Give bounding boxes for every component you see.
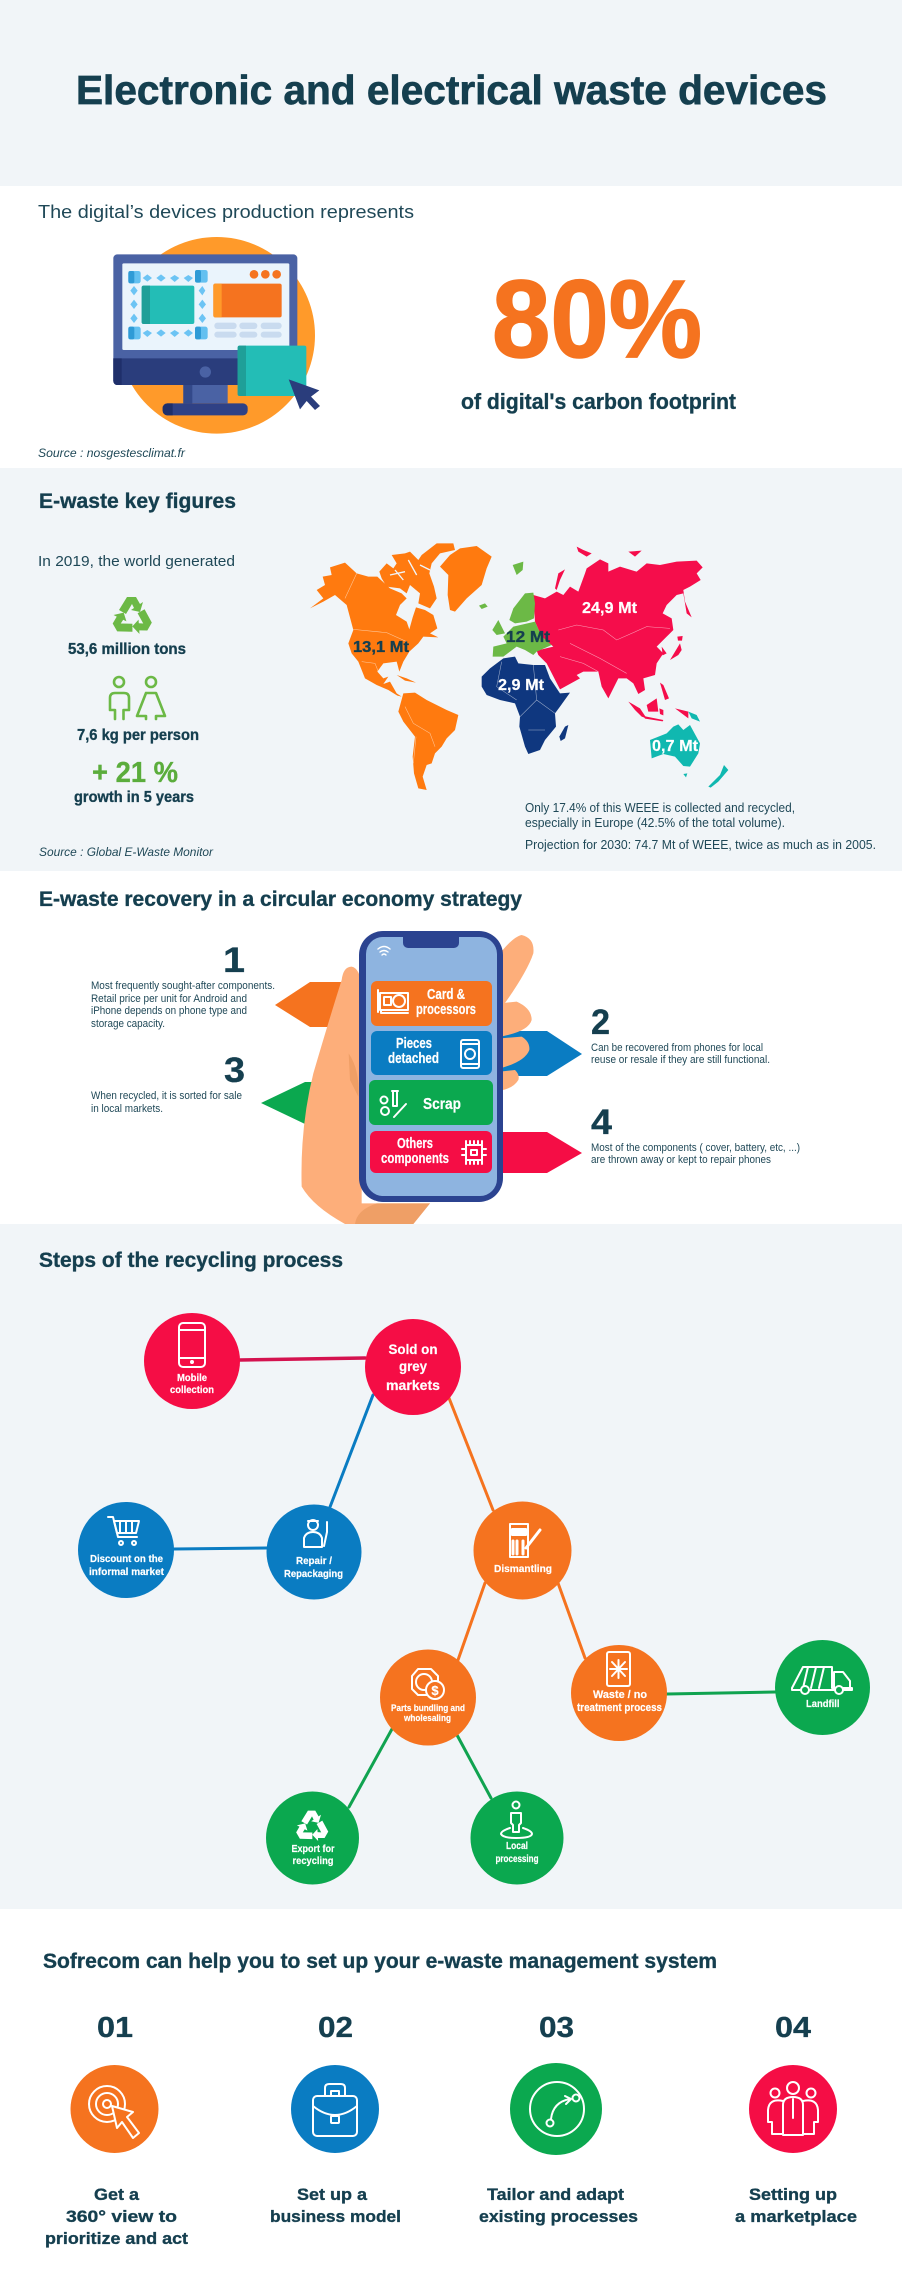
step 03: existing processes [479, 2207, 638, 2226]
stat: growth label: growth in 5 years [74, 789, 194, 806]
region: Europe [479, 562, 552, 657]
step 02: 02 [318, 2012, 353, 2044]
callout 4: Most of the components ( cover, battery, etc, ...) [591, 1142, 800, 1154]
node: landfill [775, 1640, 870, 1735]
node: discount on the informal market: Discount on the [90, 1553, 163, 1565]
row: card and processors: processors [416, 1002, 476, 1018]
step 04 [735, 2012, 857, 2226]
node: export for recycling: Export for [292, 1843, 334, 1855]
step 01: 360° view to [66, 2207, 177, 2226]
row: card and processors [371, 981, 492, 1026]
callout 4: are thrown away or kept to repair phones [591, 1154, 771, 1166]
callout 1 [91, 941, 275, 1030]
node: mobile collection: collection [170, 1384, 214, 1396]
callout 1: Retail price per unit for Android and [91, 993, 247, 1005]
arrow: green [261, 1082, 345, 1124]
arrow: orange [275, 982, 350, 1027]
icon: recycle [109, 597, 156, 638]
callout 4: 4 [591, 1103, 613, 1142]
row: others components: Others [397, 1136, 433, 1152]
region: Asia [533, 547, 703, 721]
intro text: The digital’s devices production represents [38, 202, 414, 222]
step 02: Set up a [297, 2185, 368, 2204]
callout 1: storage capacity. [91, 1018, 165, 1030]
node: mobile collection [144, 1313, 240, 1409]
node: landfill: Landfill [806, 1698, 840, 1710]
map label: Asia: 24,9 Mt [582, 600, 638, 617]
callout 3: When recycled, it is sorted for sale [91, 1090, 242, 1102]
callout 1: iPhone depends on phone type and [91, 1005, 247, 1017]
panel: Sofrecom help [0, 1909, 902, 2273]
stat: per person: 7,6 kg per person [77, 727, 199, 744]
row: scrap [369, 1080, 493, 1125]
arrow: red [495, 1132, 582, 1173]
node: parts bundling and wholesaling: Parts bundling and [391, 1703, 465, 1714]
chart: world map [310, 543, 728, 790]
node: mobile collection: Mobile [177, 1372, 207, 1384]
text block: collection note: Only 17.4% of this WEEE is collected and recycled, [525, 800, 795, 815]
row: pieces detached: detached [388, 1051, 439, 1067]
node: parts bundling and wholesaling: $ [431, 1683, 439, 1698]
callout 1: 1 [223, 941, 245, 980]
step 01: prioritize and act [45, 2229, 188, 2248]
callout 2: 2 [591, 1003, 610, 1042]
step 01: 01 [97, 2012, 133, 2044]
title: Electronic and electrical waste devices [76, 67, 827, 113]
row: others components: components [381, 1151, 449, 1167]
text block: collection note: Projection for 2030: 74.7 Mt of WEEE, twice as much as in 2005. [525, 837, 876, 852]
node: sold on grey markets: markets [386, 1377, 440, 1393]
node: waste no treatment: Waste / no [593, 1689, 647, 1701]
icon: people [110, 677, 165, 719]
node: local processing: processing [496, 1853, 538, 1865]
step 04: 04 [775, 2012, 811, 2044]
node: dismantling [474, 1502, 572, 1600]
step 02 [270, 2012, 401, 2226]
node: sold on grey markets: Sold on [388, 1341, 438, 1357]
icon: wifi [378, 946, 390, 955]
node: dismantling: Dismantling [494, 1563, 552, 1575]
stat: tons: 53,6 million tons [68, 641, 186, 658]
source: Source : Global E-Waste Monitor [39, 845, 214, 859]
arrow: blue [495, 1031, 582, 1076]
panel: carbon footprint [0, 186, 902, 468]
map label: Oceania: 0,7 Mt [652, 738, 699, 755]
node: repair and repackaging: Repair / [296, 1555, 332, 1567]
heading: E-waste key figures [39, 490, 236, 513]
panel: recycling process [0, 1224, 902, 1909]
node: parts bundling and wholesaling: wholesaling [403, 1713, 451, 1724]
text block: collection note: especially in Europe (42.5% of the total volume). [525, 815, 785, 830]
region: Africa [482, 657, 570, 754]
heading: E-waste recovery in a circular economy strategy [39, 888, 522, 911]
icon: computer monitor [113, 237, 320, 434]
row: scrap: Scrap [423, 1096, 461, 1113]
panel: e-waste key figures [0, 468, 902, 871]
row: others components [370, 1131, 492, 1173]
row: pieces detached: Pieces [396, 1036, 432, 1052]
step 01 [45, 2012, 188, 2248]
intro text: In 2019, the world generated [38, 553, 235, 570]
node: waste no treatment [571, 1645, 667, 1741]
callout 3: 3 [224, 1051, 245, 1090]
step 04: Setting up [749, 2185, 837, 2204]
node: waste no treatment: treatment process [577, 1702, 662, 1714]
step 03: 03 [539, 2012, 574, 2044]
stat: growth value: + 21 % [92, 757, 178, 789]
node: export for recycling [266, 1792, 359, 1884]
step 04: a marketplace [735, 2207, 857, 2226]
node: export for recycling: recycling [292, 1855, 334, 1867]
map label: Europe: 12 Mt [506, 629, 551, 646]
callout 4 [591, 1103, 800, 1166]
panel: header [0, 0, 902, 186]
callout 2 [591, 1003, 770, 1066]
map label: Africa: 2,9 Mt [498, 677, 545, 694]
big number: 80% [492, 258, 702, 381]
node: sold on grey markets [365, 1319, 461, 1415]
callout 3: in local markets. [91, 1103, 163, 1115]
source: Source : nosgestesclimat.fr [38, 446, 186, 460]
node: parts bundling and wholesaling [380, 1650, 476, 1746]
node: discount on the informal market [78, 1502, 174, 1598]
node: local processing [470, 1792, 564, 1884]
step 02: business model [270, 2207, 401, 2226]
step 03: Tailor and adapt [487, 2185, 624, 2204]
region: Americas [310, 543, 492, 790]
step 03 [479, 2012, 638, 2226]
callout 2: reuse or resale if they are still functional. [591, 1054, 770, 1066]
heading: Steps of the recycling process [39, 1249, 343, 1272]
callout 1: Most frequently sought-after components. [91, 980, 275, 992]
heading: Sofrecom can help you to set up your e-waste management system [43, 1950, 717, 1973]
footprint label: of digital's carbon footprint [461, 389, 737, 414]
node: local processing: Local [506, 1840, 528, 1852]
illustration: hand and phone [301, 931, 534, 1224]
node: repair and repackaging: Repackaging [284, 1568, 343, 1580]
step 01: Get a [94, 2185, 140, 2204]
node: discount on the informal market: informal market [89, 1566, 164, 1578]
callout 2: Can be recovered from phones for local [591, 1042, 763, 1054]
region: Oceania [650, 712, 728, 788]
callout 3 [91, 1051, 245, 1115]
connector lines [174, 1358, 775, 1807]
node: repair and repackaging [266, 1504, 362, 1600]
row: pieces detached [371, 1031, 492, 1075]
text block: collection note [525, 800, 876, 852]
map label: Americas: 13,1 Mt [353, 639, 410, 656]
node: sold on grey markets: grey [399, 1358, 427, 1374]
row: card and processors: Card & [427, 987, 465, 1003]
panel: circular economy [0, 871, 902, 1224]
